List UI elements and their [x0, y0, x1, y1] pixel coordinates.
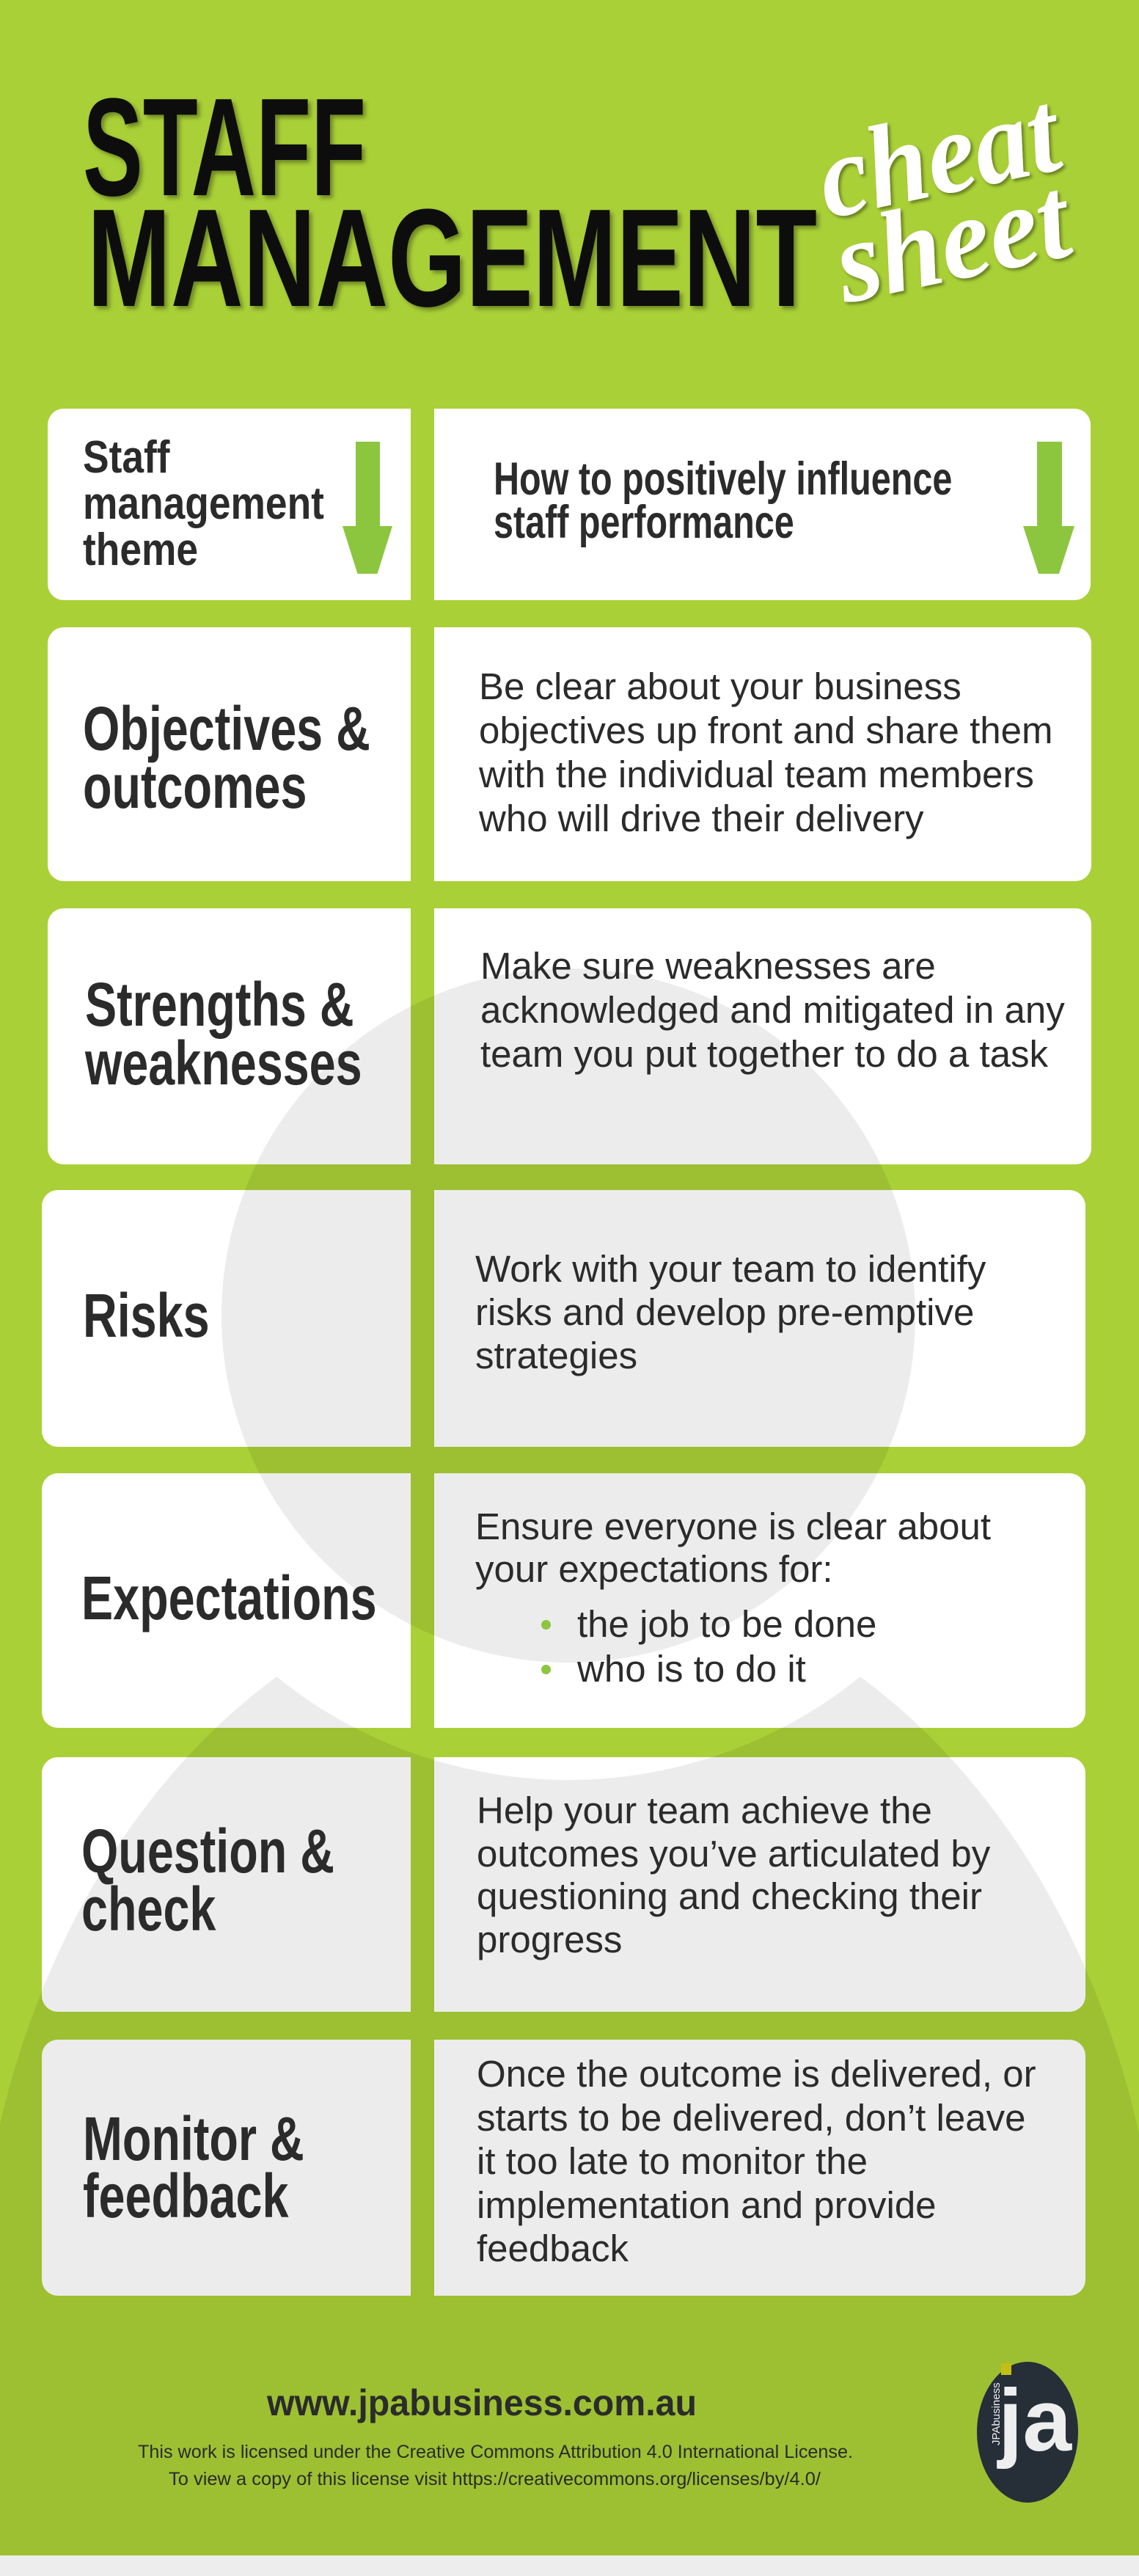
text: strengths	[480, 945, 1065, 1075]
text: question: outcomes you’ve articulated by	[477, 1833, 990, 1874]
row 2 right box	[434, 908, 1091, 1164]
text: risks: strategies	[475, 1335, 637, 1376]
text: question: questioning and checking their	[477, 1875, 982, 1917]
row 2 left box	[48, 908, 411, 1164]
header: influence column	[434, 409, 1091, 600]
text: risks: risks and develop pre-emptive	[475, 1291, 974, 1333]
row 1 left box	[48, 627, 411, 881]
header text: influence: How to positively influence	[494, 453, 952, 505]
arrow: down left	[343, 442, 392, 574]
heading: question: Question &	[81, 1817, 334, 1886]
header text: theme: Staff	[83, 432, 169, 483]
text: monitor: implementation and provide	[477, 2183, 937, 2226]
text: objectives: with the individual team members	[479, 754, 1034, 795]
license text: This work is licensed under the Creative Commons Attribution 4.0 International License.	[138, 2442, 853, 2462]
bullet list	[541, 1603, 876, 1690]
heading: question: check	[81, 1875, 216, 1944]
text: expectations	[475, 1506, 991, 1590]
heading: objectives: outcomes	[83, 752, 307, 821]
row 6 left box	[42, 2040, 411, 2296]
text: strengths: team you put together to do a task	[480, 1033, 1048, 1075]
text: question: Help your team achieve the	[477, 1789, 932, 1831]
text: monitor: starts to be delivered, don’t leave	[477, 2097, 1025, 2138]
license text	[138, 2442, 853, 2489]
text: risks	[475, 1248, 986, 1376]
text: objectives	[478, 665, 1052, 839]
bottom strip	[0, 2555, 1139, 2576]
text: monitor	[477, 2053, 1036, 2269]
cheat sheet script	[806, 65, 1083, 323]
heading: strengths: Strengths &	[85, 970, 354, 1039]
text: question: progress	[477, 1918, 622, 1960]
header text: theme: theme	[83, 525, 198, 575]
header: theme column	[48, 409, 411, 600]
text: objectives: objectives up front and share them	[479, 709, 1052, 751]
text: strengths: acknowledged and mitigated in any	[480, 989, 1065, 1031]
text: risks: Work with your team to identify	[475, 1248, 986, 1290]
text: strengths: Make sure weaknesses are	[480, 945, 936, 987]
header text: influence	[494, 453, 952, 548]
text: question	[477, 1789, 990, 1960]
row 5 left box	[42, 1757, 411, 2012]
row 1 right box	[434, 627, 1091, 881]
row 4 right box	[434, 1473, 1085, 1728]
heading: question	[81, 1817, 334, 1944]
header text: theme	[83, 432, 324, 575]
arrow: down right	[1023, 442, 1074, 574]
logo: ja	[997, 2371, 1072, 2470]
text: expectations: your expectations for:	[475, 1548, 833, 1590]
website url: www.jpabusiness.com.au	[266, 2382, 697, 2423]
text: expectations: Ensure everyone is clear about	[475, 1506, 991, 1547]
heading: objectives	[83, 694, 370, 821]
heading: strengths: weaknesses	[85, 1029, 362, 1098]
heading: monitor: feedback	[83, 2161, 288, 2230]
title	[83, 70, 821, 330]
bullet list: the job to be done	[577, 1603, 876, 1645]
row 3 right box	[434, 1190, 1085, 1447]
logo	[977, 2362, 1078, 2503]
row 6 right box	[434, 2040, 1085, 2296]
cheat sheet script: cheat	[806, 65, 1073, 244]
row 3 left box	[42, 1190, 411, 1447]
text: monitor: Once the outcome is delivered, or	[477, 2053, 1036, 2095]
title: STAFF	[83, 70, 366, 225]
text: monitor: feedback	[477, 2227, 629, 2269]
heading: risks: Risks	[83, 1281, 210, 1350]
row 4 left box	[42, 1473, 411, 1728]
heading: monitor: Monitor &	[83, 2104, 304, 2173]
text: objectives: who will drive their delivery	[479, 798, 924, 839]
text: objectives: Be clear about your business	[479, 665, 962, 707]
text: monitor: it too late to monitor the	[477, 2140, 868, 2182]
heading: objectives: Objectives &	[83, 694, 370, 763]
heading: expectations: Expectations	[81, 1564, 377, 1632]
logo: JPAbusiness	[990, 2382, 1003, 2445]
person silhouette overlay	[0, 968, 1139, 2555]
license text: To view a copy of this license visit https://creativecommons.org/licenses/by/4.0/	[169, 2469, 821, 2489]
row 5 right box	[434, 1757, 1085, 2012]
heading: strengths	[85, 970, 362, 1098]
heading: monitor	[83, 2104, 304, 2230]
footer	[138, 2382, 853, 2489]
header text: theme: management	[83, 478, 324, 529]
header text: influence: staff performance	[494, 497, 794, 548]
bullet list: who is to do it	[577, 1648, 806, 1690]
